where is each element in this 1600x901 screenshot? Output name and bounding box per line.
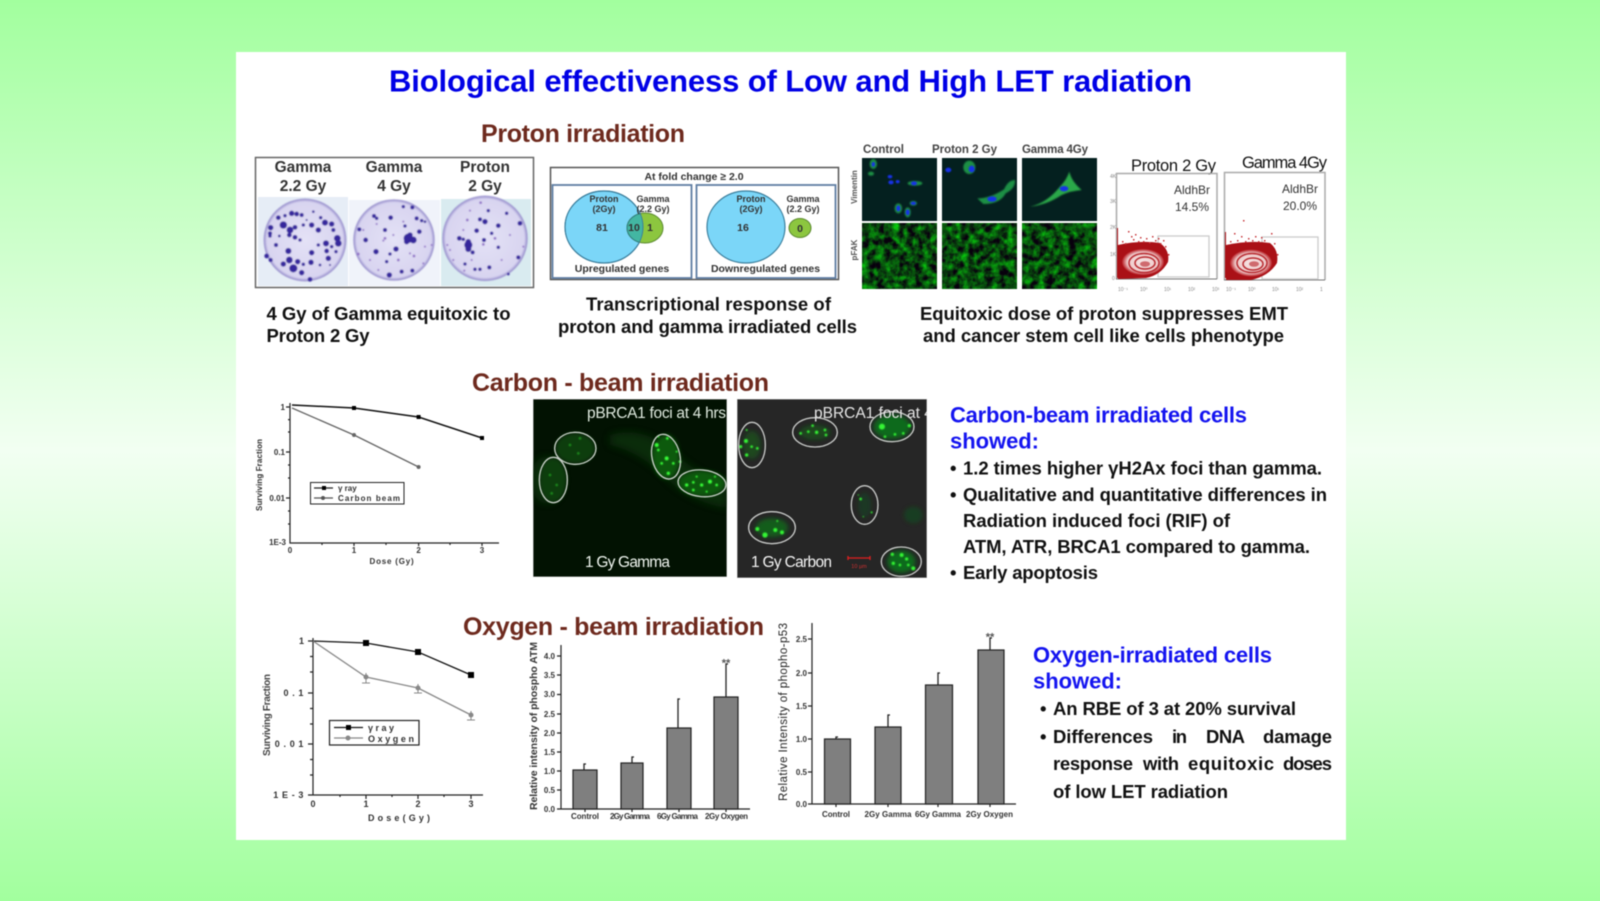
foci (739, 424, 915, 570)
error bars (836, 638, 992, 739)
y tick labels: 0.5 (544, 786, 556, 795)
downregulated panel: Downregulated genes (711, 263, 820, 275)
panel: venn diagrams (550, 168, 838, 280)
y tick labels (273, 636, 304, 800)
downregulated panel: 0 (797, 223, 803, 235)
y axis title: Relative intensity of phospho ATM (528, 642, 540, 810)
downregulated panel (696, 185, 836, 278)
oxygen findings heading: Oxygen-irradiated cells (1033, 642, 1272, 668)
x tick labels: 0 (310, 799, 316, 809)
heading: carbon beam: Carbon - beam irradiation (472, 369, 769, 397)
flow axis ticks: 10³ (1212, 287, 1220, 293)
downregulated panel: Gamma (786, 194, 820, 204)
plot frames and gates (1116, 172, 1325, 280)
flow gate percentages: 20.0% (1283, 199, 1317, 213)
upregulated panel: (2Gy) (592, 204, 616, 214)
y tick labels: 1E-3 (269, 538, 287, 547)
x labels: 2Gy Gamma (610, 812, 651, 821)
flow axis ticks: 10⁰ (1248, 287, 1256, 293)
downregulated panel: (2Gy) (739, 204, 763, 214)
x tick labels: 3 (480, 546, 485, 555)
colony labels (275, 159, 510, 195)
x tick labels (310, 799, 474, 809)
error bars (584, 664, 728, 770)
upregulated panel: Gamma (636, 194, 670, 204)
flow axis ticks: 10¹ (1272, 287, 1280, 293)
oxygen findings bullets: Differences (1053, 726, 1153, 747)
oxygen findings bullets: response (1053, 753, 1133, 774)
y tick labels: 1.0 (544, 767, 556, 776)
y tick labels: 0.0 (544, 805, 556, 814)
flow axis ticks: 10⁻¹ (1118, 287, 1128, 293)
oxygen findings heading: showed: (1033, 668, 1122, 694)
y tick labels: 0.01 (269, 494, 286, 503)
micrograph: 1 Gy carbon (736, 398, 928, 578)
image label: 1 Gy Gamma (585, 554, 670, 571)
flow axis ticks: 2K (1110, 225, 1117, 231)
carbon findings bullets: Qualitative and quantitative differences in (963, 484, 1327, 505)
y tick labels: 1.5 (544, 748, 556, 757)
bars (573, 697, 738, 809)
oxygen findings bullets: • (1040, 726, 1046, 747)
flow axis ticks: 10⁻¹ (1226, 287, 1236, 293)
oxygen line (313, 641, 475, 720)
pFAK images (862, 223, 1097, 289)
x tick labels: 2 (415, 799, 421, 809)
scale bar (848, 556, 870, 570)
column labels: Gamma 4Gy (1022, 144, 1089, 156)
caption: transcriptional response: Transcriptional response of (586, 294, 832, 314)
infographic canvas (236, 52, 1346, 840)
colony labels: 2 Gy (468, 178, 502, 195)
oxygen findings bullets: in (1172, 726, 1187, 747)
y tick labels: 0 . 1 (283, 688, 304, 698)
scale bar: 10 µm (851, 564, 867, 570)
flow gate percentages: AldhBr (1282, 182, 1318, 196)
bars (824, 650, 1004, 804)
image label: 1 Gy Carbon (751, 554, 832, 571)
x labels: 2Gy Oxygen (966, 810, 1013, 819)
x tick labels: 3 (468, 799, 474, 809)
x labels: 6Gy Gamma (657, 812, 699, 821)
downregulated panel: (2.2 Gy) (786, 204, 820, 214)
text block: carbon findings (950, 402, 1327, 583)
upregulated panel: Proton (590, 194, 618, 204)
white content panel (236, 52, 1346, 840)
caption: colony assay: 4 Gy of Gamma equitoxic to (266, 303, 510, 324)
scatter events (1122, 220, 1278, 256)
column labels: Proton 2 Gy (932, 144, 998, 156)
x labels: 2Gy Oxygen (705, 812, 748, 821)
caption: EMT: Equitoxic dose of proton suppresses EMT (920, 303, 1289, 324)
flow plot titles (1131, 154, 1328, 175)
flow axis ticks: 10⁰ (1140, 287, 1148, 293)
y tick labels (544, 652, 556, 814)
vimentin images (862, 158, 1097, 221)
panel: flow cytometry plots (1110, 154, 1328, 293)
column labels: Control (863, 144, 904, 156)
flow density contours (1117, 220, 1278, 280)
oxygen findings bullets: DNA (1206, 726, 1245, 747)
title: Biological effectiveness of Low and High LET radiation (389, 64, 1192, 98)
colony labels: 4 Gy (377, 178, 411, 195)
cell cytoplasm glow (530, 432, 727, 508)
panel: immunofluorescence micrographs (850, 144, 1097, 289)
flow plot titles: Gamma 4Gy (1242, 154, 1328, 172)
colony labels: Gamma (366, 159, 423, 176)
carbon findings bullets: Radiation induced foci (RIF) of (963, 510, 1231, 531)
carbon findings heading: showed: (950, 428, 1039, 454)
legend: γ ray (338, 484, 357, 493)
fold change header: At fold change ≥ 2.0 (644, 171, 744, 183)
caption: transcriptional response: proton and gamma irradiated cells (558, 316, 857, 337)
y tick labels (269, 403, 287, 547)
flow axis ticks: 4K (1110, 174, 1117, 180)
y tick labels: 0.1 (274, 448, 286, 457)
upregulated panel: (2.2 Gy) (636, 204, 670, 214)
x tick labels (288, 546, 485, 555)
downregulated panel: 16 (737, 222, 749, 234)
gamma line (292, 405, 484, 440)
x labels: Control (571, 812, 599, 821)
legend: O x y g e n (368, 734, 414, 744)
x labels: 2Gy Gamma (864, 810, 912, 819)
flow axis ticks: 0 (1112, 276, 1115, 282)
upregulated panel: Upregulated genes (575, 263, 669, 275)
upregulated panel: 10 (628, 222, 640, 234)
nucleus outlines (539, 432, 727, 503)
y tick labels: 2.5 (796, 635, 808, 644)
x labels: 6Gy Gamma (915, 810, 962, 819)
flow axis ticks: 10¹ (1164, 287, 1172, 293)
y tick labels: 1 (281, 403, 286, 412)
column labels (863, 144, 1089, 156)
flow gate percentages: AldhBr (1174, 183, 1210, 197)
oxygen findings bullets: equitoxic (1188, 753, 1274, 774)
y tick labels: 4.0 (544, 652, 556, 661)
flow axis ticks: 3K (1110, 199, 1117, 205)
flow plot titles: Proton 2 Gy (1131, 157, 1217, 175)
y tick labels: 0 . 0 1 (275, 739, 304, 749)
y tick labels (796, 635, 808, 809)
upregulated panel: 1 (647, 222, 653, 234)
carbon findings bullets (950, 458, 1327, 583)
foci caption: pBRCA1 foci at 4 hrs (814, 405, 959, 422)
oxygen findings bullets (1040, 698, 1332, 802)
x tick labels: 0 (288, 546, 293, 555)
carbon findings bullets: 1.2 times higher γH2Ax foci than gamma. (963, 458, 1322, 478)
heading: oxygen beam: Oxygen - beam irradiation (463, 613, 764, 641)
carbon findings bullets: Early apoptosis (963, 562, 1098, 583)
significance marker: ** (986, 632, 995, 644)
x labels (822, 810, 1013, 819)
caption: colony assay: Proton 2 Gy (266, 325, 370, 346)
y tick labels: 1.5 (796, 702, 808, 711)
y tick labels: 1.0 (796, 735, 808, 744)
y tick labels: 3.0 (544, 690, 556, 699)
legend: Carbon beam (338, 494, 400, 503)
y axis title: Surviving Fraction (262, 674, 273, 756)
legend: γ r a y (368, 723, 394, 733)
y tick labels: 0.5 (796, 768, 808, 777)
carbon findings heading: Carbon-beam irradiated cells (950, 402, 1247, 428)
x labels (571, 812, 748, 821)
carbon line (292, 408, 421, 469)
dish backgrounds (258, 197, 531, 286)
x tick labels: 1 (363, 799, 369, 809)
carbon findings heading (950, 402, 1247, 454)
y tick labels: 1 E - 3 (273, 790, 304, 800)
flow gate percentages (1174, 182, 1318, 214)
plates with colonies (264, 196, 528, 282)
y tick labels: 3.5 (544, 671, 556, 680)
legend (310, 482, 404, 504)
caption: EMT (920, 303, 1289, 346)
upregulated panel: 81 (596, 222, 608, 234)
oxygen findings bullets: doses (1283, 753, 1332, 774)
legend (330, 720, 419, 745)
oxygen findings bullets: with (1142, 753, 1179, 774)
colony labels: 2.2 Gy (280, 178, 327, 195)
panel: colony assays (256, 158, 534, 288)
x tick labels: 1 (352, 546, 357, 555)
colony labels: Gamma (275, 159, 332, 176)
oxygen findings bullets: An RBE of 3 at 20% survival (1053, 698, 1296, 719)
row labels: Vimentin (850, 170, 859, 204)
y tick labels: 2.5 (544, 710, 556, 719)
flow gate percentages: 14.5% (1175, 200, 1209, 214)
row labels: pFAK (850, 239, 859, 260)
x axis title: D o s e ( G y ) (368, 813, 430, 823)
chart: oxygen survival curve (262, 636, 483, 823)
y tick labels: 0.0 (796, 800, 808, 809)
y axis title: Relative Intensity of phopho-p53 (778, 623, 790, 801)
y tick labels: 2.0 (796, 669, 808, 678)
x axis title: Dose (Gy) (370, 557, 414, 566)
oxygen findings bullets: of low LET radiation (1053, 781, 1228, 802)
chart: carbon survival curve (255, 403, 499, 566)
y axis title: Surviving Fraction (255, 439, 264, 511)
text block: oxygen findings (1033, 642, 1332, 802)
flow axis ticks (1110, 174, 1323, 293)
foci caption: pBRCA1 foci at 4 hrs (587, 405, 726, 422)
flow axis ticks: 10² (1296, 287, 1304, 293)
nucleus outlines (739, 412, 921, 576)
downregulated panel: Proton (736, 194, 766, 204)
colony labels: Proton (460, 159, 510, 176)
micrograph: 1 Gy gamma (530, 399, 727, 577)
x labels: Control (822, 810, 850, 819)
x tick labels: 2 (416, 546, 421, 555)
foci (655, 436, 718, 493)
carbon findings bullets: • (950, 458, 956, 478)
flow axis ticks: 1 (1320, 287, 1323, 293)
gamma line (313, 640, 474, 678)
caption: transcriptional response (558, 294, 857, 337)
y tick labels: 1 (299, 636, 304, 646)
carbon findings bullets: ATM, ATR, BRCA1 compared to gamma. (963, 536, 1310, 557)
flow axis ticks: 10² (1188, 287, 1196, 293)
carbon findings bullets: • (950, 562, 956, 583)
carbon findings bullets: • (950, 484, 956, 505)
oxygen findings bullets: • (1040, 698, 1046, 719)
oxygen findings bullets: damage (1263, 726, 1332, 747)
flow axis ticks: 1K (1110, 252, 1117, 258)
oxygen findings heading (1033, 642, 1272, 694)
heading: proton irradiation: Proton irradiation (481, 120, 685, 148)
y tick labels: 2.0 (544, 729, 556, 738)
caption: EMT: and cancer stem cell like cells phenotype (923, 325, 1284, 346)
chart: phospho ATM bars (528, 642, 750, 821)
upregulated panel (552, 185, 692, 278)
caption: colony assay (266, 303, 510, 346)
row labels (850, 170, 859, 260)
significance marker: ** (722, 658, 731, 670)
chart: phospho p53 bars (778, 623, 1016, 819)
